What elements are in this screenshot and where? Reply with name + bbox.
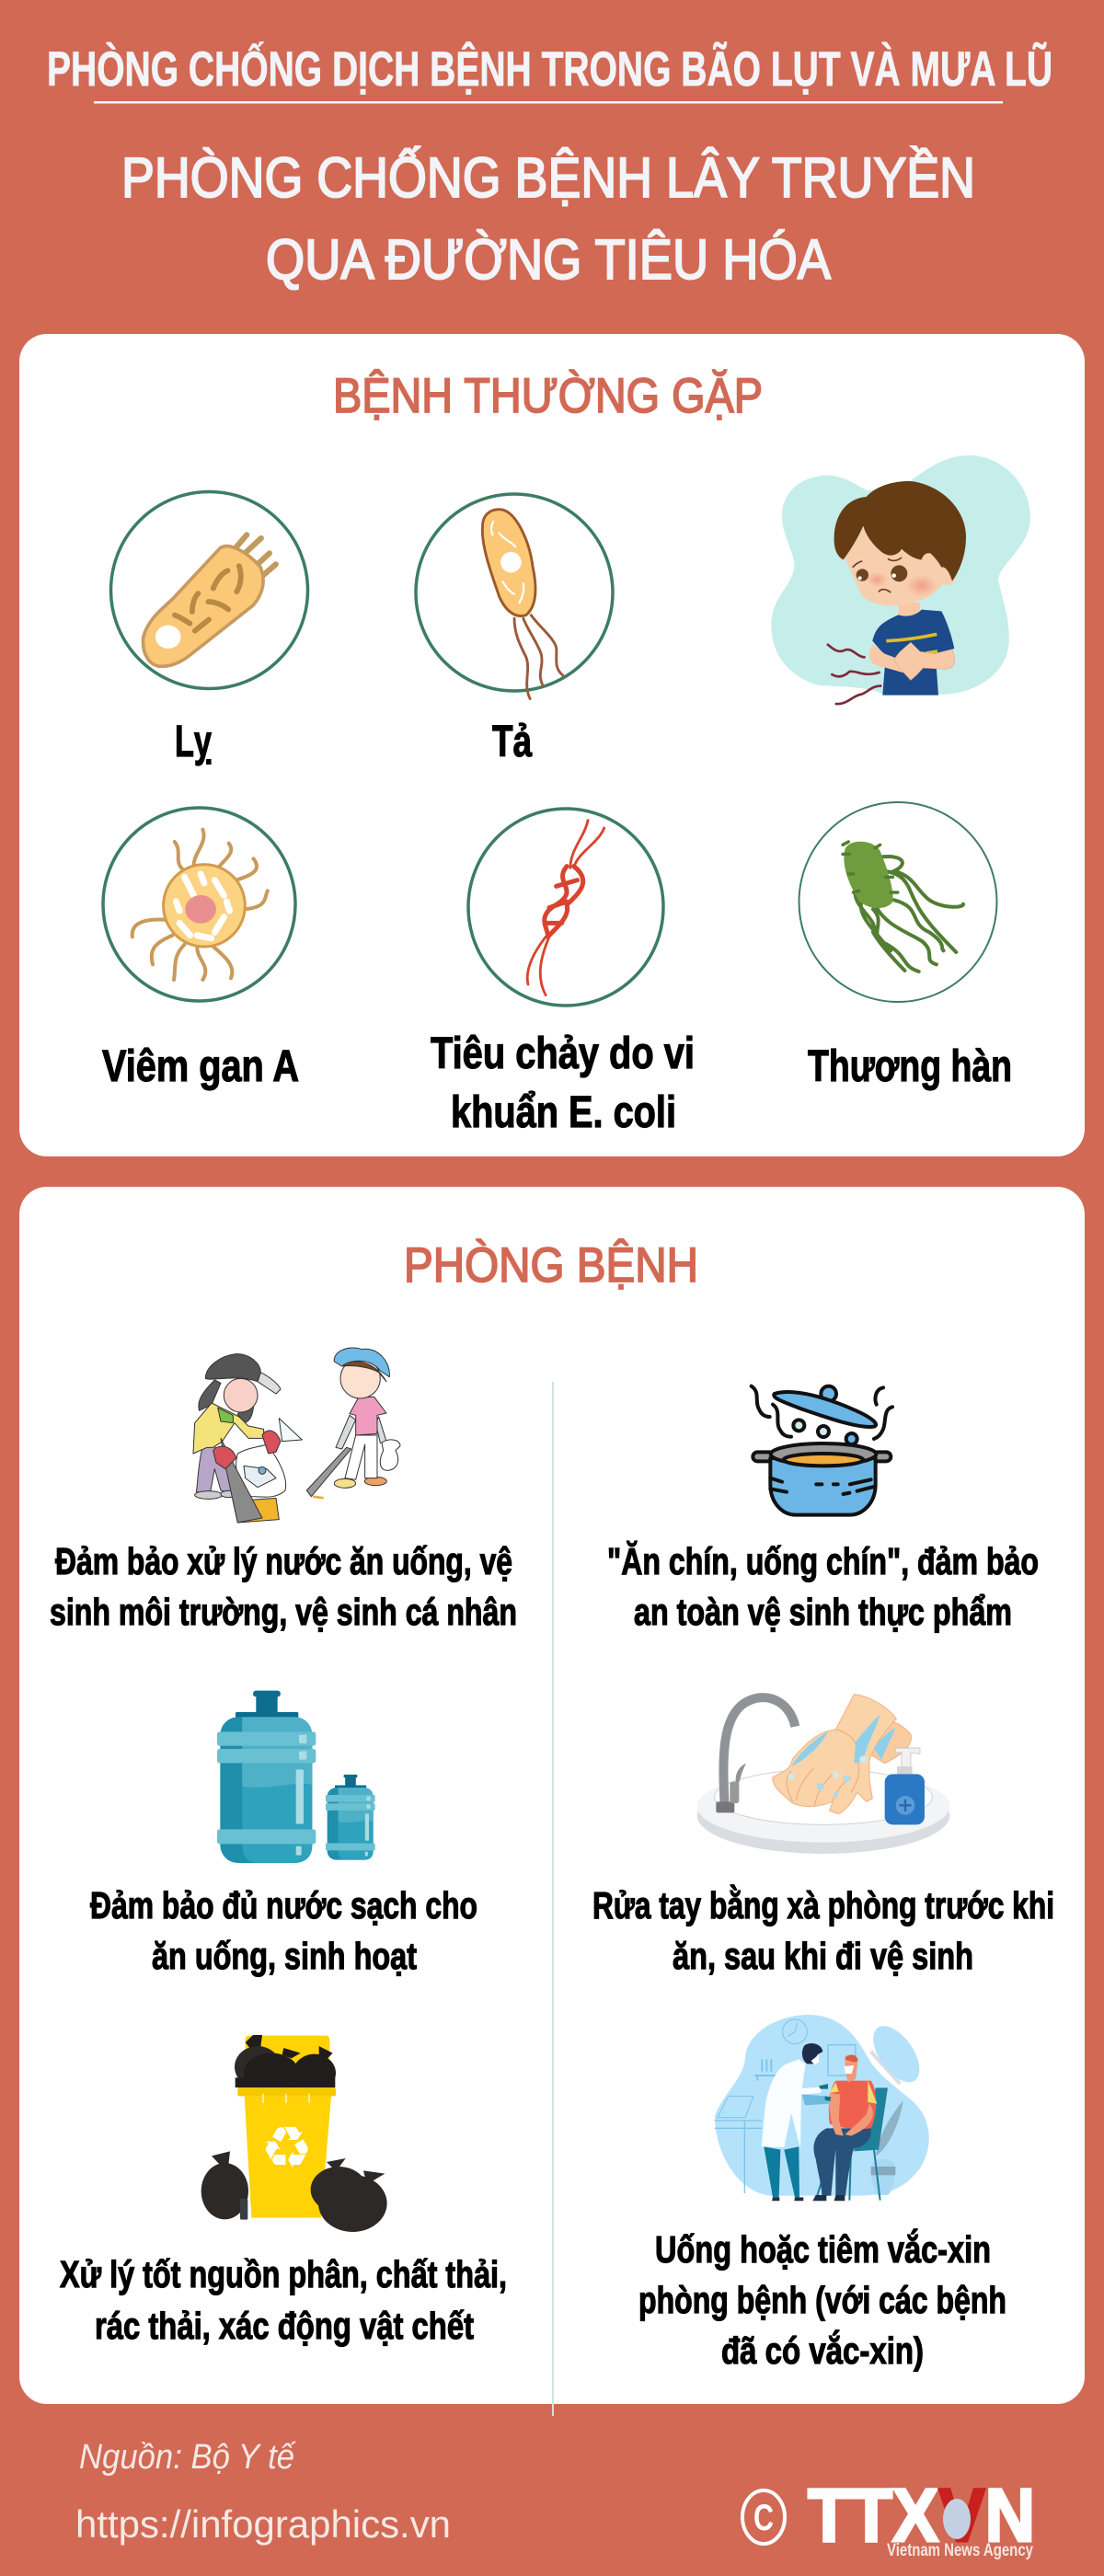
icon: typhoid bacterium xyxy=(799,802,997,1002)
label: E. coli diarrhea: khuẩn E. coli xyxy=(451,1088,676,1137)
text: cook food and drink xyxy=(607,1540,1039,1633)
text: wash hands: ăn, sau khi đi vệ sinh xyxy=(673,1935,973,1977)
icon: rubbish bin with bags: ♻ xyxy=(260,2114,313,2182)
heading: prevention: PHÒNG BỆNH xyxy=(404,1238,698,1293)
label: Lỵ: Lỵ xyxy=(175,718,212,766)
icon: sick boy with stomach ache xyxy=(771,455,1030,704)
text: waste treatment: Xử lý tốt nguồn phân, chất thải, xyxy=(60,2253,507,2295)
text: vaccination: Uống hoặc tiêm vắc-xin xyxy=(655,2228,991,2271)
icon: people collecting rubbish xyxy=(193,1348,400,1523)
logo: TTXVN: C xyxy=(753,2498,774,2538)
label: E. coli diarrhea xyxy=(431,1029,695,1137)
icon: hepatitis A virus xyxy=(103,808,295,1001)
icon: dysentery bacterium xyxy=(110,491,307,688)
text: waste treatment: rác thải, xác động vật chết xyxy=(95,2305,474,2347)
text: water and hygiene: sinh môi trường, vệ sinh cá nhân xyxy=(50,1591,517,1633)
text: waste treatment xyxy=(60,2253,507,2347)
heading: common diseases: BỆNH THƯỜNG GẶP xyxy=(333,369,763,423)
text: wash hands xyxy=(592,1884,1054,1977)
text: clean water: Đảm bảo đủ nước sạch cho xyxy=(90,1884,477,1926)
text: clean water xyxy=(90,1884,477,1977)
icon: cholera bacterium xyxy=(416,494,613,699)
logo: TTXVN: Vietnam News Agency xyxy=(887,2541,1033,2560)
logo: TTXVN: TTXVN xyxy=(808,2474,1035,2558)
main heading: QUA ĐƯỜNG TIÊU HÓA xyxy=(266,228,831,291)
source note: Nguồn: Bộ Y tế xyxy=(79,2438,297,2477)
text: water and hygiene: Đảm bảo xử lý nước ăn uống, vệ xyxy=(55,1540,512,1582)
text: water and hygiene xyxy=(50,1540,517,1633)
website: https://infographics.vn xyxy=(75,2502,451,2546)
icon: E. coli bacterium xyxy=(468,809,663,1006)
text: vaccination: đã có vắc-xin) xyxy=(721,2329,924,2372)
panel: prevention xyxy=(19,1187,1085,2416)
icon: cooking pot xyxy=(752,1386,892,1515)
label: Viêm gan A: Viêm gan A xyxy=(102,1042,299,1091)
icon: hand washing at sink xyxy=(697,1695,949,1854)
main heading xyxy=(121,146,975,291)
label: Thương hàn: Thương hàn xyxy=(808,1042,1012,1091)
icon: vaccination scene xyxy=(715,2015,929,2201)
icon: rubbish bin with bags xyxy=(201,2035,387,2232)
label: E. coli diarrhea: Tiêu chảy do vi xyxy=(431,1029,695,1078)
text: cook food and drink: an toàn vệ sinh thực phẩm xyxy=(634,1591,1012,1633)
panel: common diseases xyxy=(19,334,1085,1156)
main heading: PHÒNG CHỐNG BỆNH LÂY TRUYỀN xyxy=(121,146,975,209)
text: vaccination: phòng bệnh (với các bệnh xyxy=(638,2279,1006,2321)
text: clean water: ăn uống, sinh hoạt xyxy=(152,1935,417,1977)
icon: water bottles xyxy=(217,1691,375,1863)
text: vaccination xyxy=(638,2228,1006,2372)
label: Tả: Tả xyxy=(492,718,532,766)
